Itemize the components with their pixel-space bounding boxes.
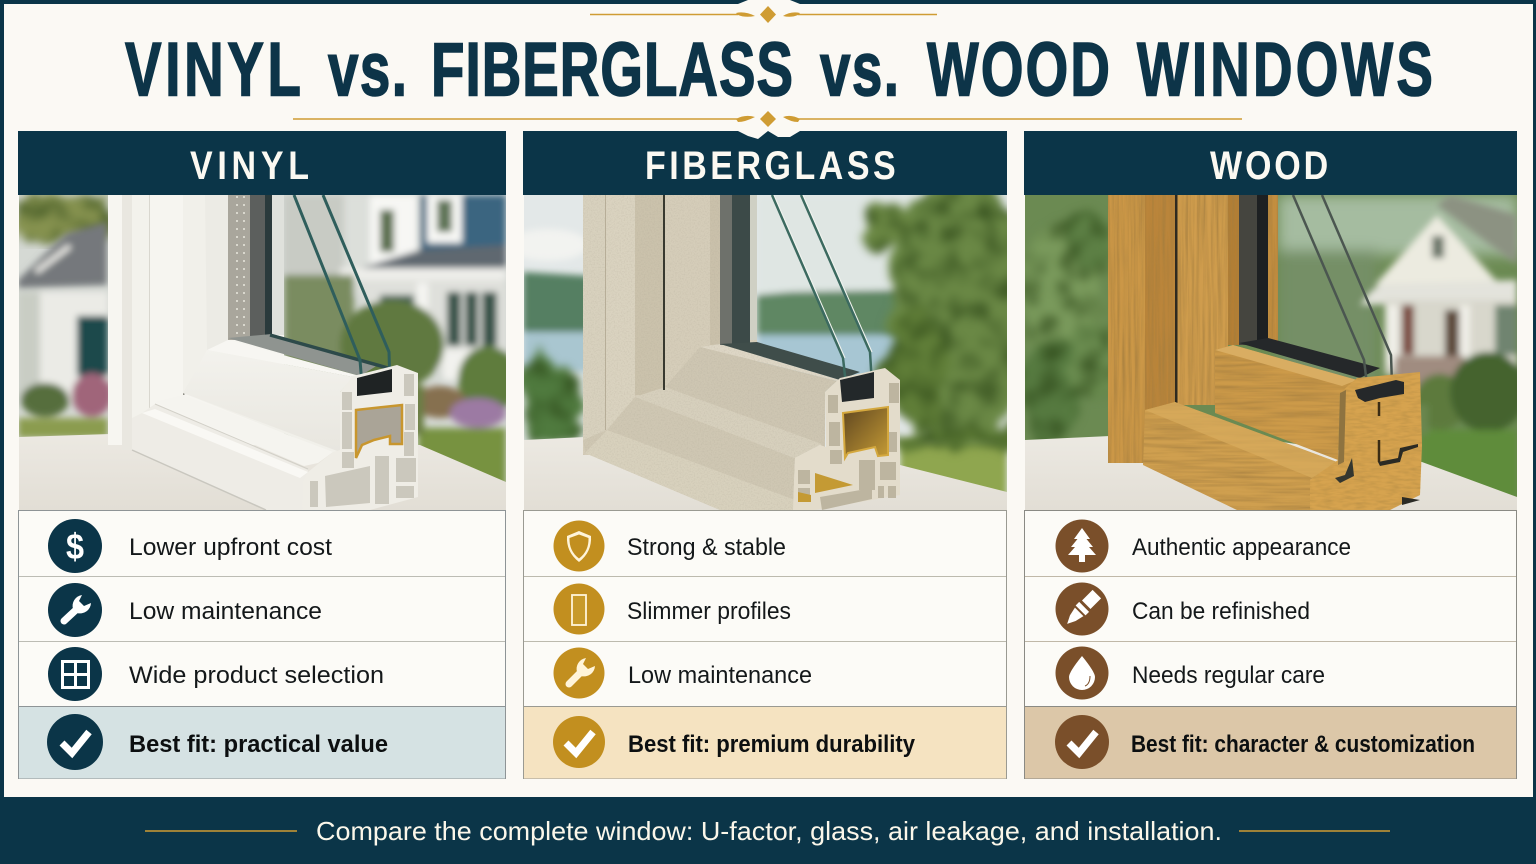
title ornament: top: [590, 0, 937, 23]
row: authentic appearance: Authentic appearance: [1132, 534, 1351, 561]
title: FIBERGLASS: [431, 28, 793, 113]
row: can be refinished: [1056, 582, 1310, 636]
best fit: fiberglass: [524, 706, 1006, 778]
panel: vinyl: [18, 131, 518, 778]
panel: wood: [1014, 131, 1526, 778]
best fit: wood: [1025, 706, 1516, 778]
title: VINYL: [125, 28, 301, 113]
fiberglass profile section: [793, 368, 900, 510]
row: low maintenance: [554, 648, 812, 698]
row: lower upfront cost: $: [66, 526, 84, 567]
title: vs.: [820, 28, 899, 113]
feature list: fiberglass: [524, 510, 1006, 778]
row: strong and stable: [554, 520, 786, 572]
best fit: vinyl: Best fit: practical value: [129, 731, 388, 758]
heading: vinyl: [18, 131, 506, 195]
row: lower upfront cost: Lower upfront cost: [129, 534, 332, 561]
fiberglass frame: [583, 195, 840, 510]
row: can be refinished: Can be refinished: [1132, 598, 1310, 625]
vinyl frame: [108, 195, 388, 510]
fiberglass glass panes: [772, 195, 872, 385]
row: strong and stable: Strong & stable: [627, 534, 786, 561]
fiberglass glazing channel: [663, 195, 860, 390]
heading: fiberglass: FIBERGLASS: [645, 142, 896, 188]
wood end grain section: [1310, 372, 1422, 510]
row: lower upfront cost: [48, 519, 332, 573]
vinyl glass panes: [294, 195, 390, 385]
row: needs regular care: [1056, 646, 1325, 700]
best fit: wood: Best fit: character & customization: [1131, 731, 1475, 758]
footer banner: [0, 797, 1536, 864]
row: slimmer profiles: Slimmer profiles: [627, 598, 791, 625]
row: slimmer profiles: [554, 584, 791, 634]
heading: wood: WOOD: [1210, 142, 1328, 188]
vinyl profile section: [302, 365, 418, 510]
panel: fiberglass: [508, 131, 1032, 778]
row: authentic appearance: [1056, 520, 1351, 572]
title ornament: bottom: [293, 111, 1242, 127]
row: low maintenance: [48, 583, 322, 637]
wood glass panes: [1293, 195, 1392, 385]
footer banner: Compare the complete window: U-factor, glass, air leakage, and installation.: [316, 816, 1222, 846]
row: needs regular care: Needs regular care: [1132, 662, 1325, 689]
best fit: vinyl: [19, 706, 505, 778]
row: low maintenance: Low maintenance: [129, 598, 322, 625]
title: vs.: [328, 28, 407, 113]
best fit: fiberglass: Best fit: premium durability: [628, 731, 916, 758]
row: wide product selection: Wide product selection: [129, 662, 384, 689]
photo: fiberglass window cross-section: [524, 195, 1007, 510]
row: low maintenance: Low maintenance: [628, 662, 812, 689]
feature list: vinyl: [18, 510, 506, 778]
title: WINDOWS: [1137, 28, 1433, 113]
heading: vinyl: VINYL: [190, 142, 309, 188]
row: wide product selection: [48, 647, 384, 701]
heading: fiberglass: [523, 131, 1007, 195]
title: [125, 28, 1433, 113]
heading: wood: [1024, 131, 1517, 195]
wood frame: [1108, 195, 1380, 510]
feature list: wood: [1024, 510, 1516, 778]
photo: wood window cross-section: [1014, 195, 1526, 510]
title: WOOD: [927, 28, 1110, 113]
photo: vinyl window cross-section: [18, 195, 518, 510]
header ornament notch: [738, 131, 800, 139]
